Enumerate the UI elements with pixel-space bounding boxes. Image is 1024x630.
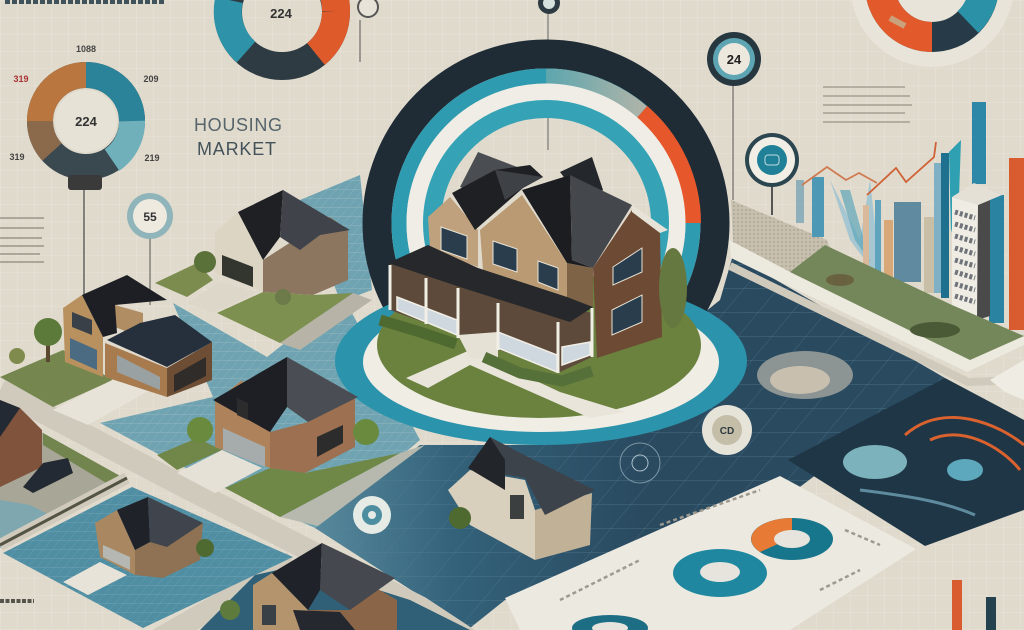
- chart: donut two: [751, 518, 833, 560]
- illustration: house far left: [0, 400, 42, 487]
- chart: left donut: 1088: [76, 44, 96, 54]
- panel: blueprint ground: [315, 255, 945, 628]
- icon: badge 24: 24: [727, 52, 742, 67]
- chart: central rings: [377, 54, 715, 392]
- chart: left donut: 319: [9, 152, 25, 162]
- icon: badge top center: [538, 0, 560, 150]
- chart: left donut: 224: [75, 114, 98, 129]
- porch base: [390, 263, 592, 372]
- chart: top right donut: [850, 0, 1014, 67]
- panel: dark chart sheet: [788, 378, 1024, 546]
- illustration: house upper left: [155, 190, 353, 343]
- icon: badge 55: 55: [143, 210, 157, 224]
- illustration: main house: [380, 152, 687, 381]
- illustration: house center left: [157, 357, 400, 517]
- porch roof: [388, 245, 593, 322]
- title: housing market: [194, 115, 282, 159]
- chart: top donut: 224: [270, 6, 293, 21]
- illustration: house center bottom: [448, 437, 595, 560]
- panel: paper sheet with donuts: [505, 476, 916, 630]
- panel: bottom-left water lot: [0, 478, 470, 630]
- text block: top-left header marks: [5, 0, 165, 4]
- illustration: house left: [0, 275, 212, 425]
- main roofs: [452, 165, 668, 268]
- building: [952, 183, 1002, 320]
- chart: left donut: 209: [143, 74, 159, 84]
- illustration: house bottom left small: [63, 497, 214, 595]
- panel: hatched verge: [280, 200, 837, 526]
- chart: left donut: 319: [13, 74, 29, 84]
- title: housing market: MARKET: [197, 139, 276, 159]
- chart: left donut: 219: [144, 153, 160, 163]
- text block: bottom-left label: [0, 599, 34, 603]
- panel: central platform rings: [335, 272, 747, 445]
- icon: badge top left small: [358, 0, 378, 62]
- icon: badge right: [745, 133, 799, 215]
- text block: right notes: [823, 87, 912, 122]
- illustration: house bottom center: [220, 543, 397, 630]
- streets: [0, 266, 1024, 630]
- shrubs: [380, 320, 456, 344]
- icon: car: [23, 458, 73, 493]
- icon: pin center: [702, 405, 752, 455]
- chart: donut one: [673, 549, 767, 597]
- icon: badge 24: [707, 32, 761, 200]
- chart: top donut: [228, 0, 336, 66]
- illustration: blueprint car and chart: [620, 351, 853, 483]
- railing: [397, 297, 590, 372]
- chart: left donut: [9, 44, 160, 295]
- walls: [428, 195, 662, 358]
- text block: left notes: [0, 218, 44, 262]
- icon: badge 55: [127, 193, 173, 305]
- strip: green roadside: [729, 240, 1024, 400]
- title: housing market: HOUSING: [194, 115, 282, 135]
- windows: [441, 227, 642, 335]
- chart: bottom right bars: [952, 580, 996, 630]
- panel: water channels: [100, 175, 420, 528]
- chart: right bar chart and skyline: [796, 102, 1024, 330]
- back roofs: [460, 152, 603, 205]
- panel: lot, far left: [0, 400, 122, 548]
- icon: pin center: CD: [720, 426, 734, 437]
- icon: pin lower: [353, 496, 391, 534]
